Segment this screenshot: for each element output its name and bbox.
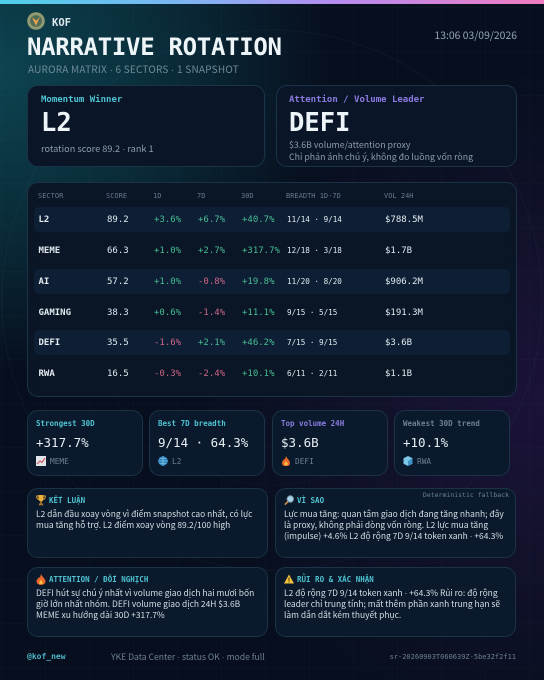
row: AI: +1.0%: [154, 277, 181, 287]
stat card: best 7D breadth: [149, 410, 265, 476]
row: MEME: +1.0%: [154, 246, 181, 256]
footer: handle: @kof_new: [27, 652, 66, 661]
body text: L2 dẫn đầu xoay vòng vì điểm snapshot cao nhất, có lực: [36, 508, 252, 520]
row: MEME: $1.7B: [385, 246, 412, 256]
stat card: best 7D breadth: L2: [172, 457, 181, 466]
row: DEFI: 35.5: [107, 338, 129, 348]
row: L2: 11/14 · 9/14: [287, 215, 342, 224]
row: L2: +40.7%: [242, 215, 275, 225]
row: AI: [34, 269, 510, 294]
row: RWA: $1.1B: [385, 369, 412, 379]
row: RWA: 16.5: [107, 369, 129, 379]
body text: MEME xu hướng dài 30D +317.7%: [36, 609, 165, 621]
row: GAMING: 9/15 · 5/15: [287, 308, 337, 317]
row: DEFI: DEFI: [38, 338, 60, 348]
row: DEFI: $3.6B: [385, 338, 412, 348]
body text: DEFI hút sự chú ý nhất vì volume giao dịch hai mươi bốn: [36, 587, 254, 599]
row: GAMING: -1.4%: [198, 308, 225, 318]
table header: 30D: [241, 192, 254, 200]
top gradient bar: [0, 0, 544, 4]
body text: là proxy, không phải dòng vốn ròng. L2 lực mua tăng: [284, 519, 488, 531]
fallback note: Deterministic fallback: [423, 491, 509, 499]
table header: VOL 24H: [384, 192, 414, 200]
row: DEFI: [34, 330, 510, 355]
stat card: top volume 24H: Top volume 24H: [281, 419, 344, 428]
icon: magnifier: [284, 495, 294, 506]
row: L2: +6.7%: [198, 215, 225, 225]
body text: [36, 587, 254, 621]
heading: VÌ SAO: [297, 496, 324, 505]
row: GAMING: [34, 300, 510, 325]
table header: 7D: [197, 192, 205, 200]
stat card: best 7D breadth: 9/14 · 64.3%: [158, 434, 248, 450]
insight panel: why: [275, 488, 516, 558]
stat card: top volume 24H: [272, 410, 388, 476]
icon: trophy: [36, 495, 46, 506]
brand name: KOF: [52, 17, 71, 29]
row: AI: 57.2: [107, 277, 129, 287]
heading: ATTENTION / ĐỐI NGHỊCH: [49, 575, 148, 584]
row: GAMING: 38.3: [107, 308, 129, 318]
body text: [284, 587, 500, 621]
row: L2: $788.5M: [385, 215, 423, 225]
stat card: strongest 30D: [27, 410, 143, 476]
heading: KẾT LUẬN: [49, 496, 85, 505]
stat card: top volume 24H: DEFI: [295, 457, 314, 466]
stat card: strongest 30D: +317.7%: [36, 434, 89, 450]
row: RWA: -0.3%: [154, 369, 181, 379]
row: DEFI: 7/15 · 9/15: [287, 338, 337, 347]
stat card: strongest 30D: MEME: [50, 457, 69, 466]
row: GAMING: $191.3M: [385, 308, 423, 318]
row: RWA: RWA: [38, 369, 55, 379]
caption: volume proxy note: Chỉ phản ánh chú ý, không đo luồng vốn ròng: [289, 150, 473, 163]
row: L2: +3.6%: [154, 215, 181, 225]
row: RWA: [34, 361, 510, 386]
title: NARRATIVE ROTATION: [27, 32, 282, 60]
panel: sector table: [27, 182, 517, 397]
caption: rotation score: rotation score 89.2 · rank 1: [41, 141, 154, 155]
row: RWA: -2.4%: [198, 369, 225, 379]
body text: L2 độ rộng 7D 9/14 token xanh · +64.3% Rủi ro: độ rộng: [284, 587, 498, 599]
stat card: weakest 30D trend: [394, 410, 510, 476]
row: L2: 89.2: [107, 215, 129, 225]
body text: [36, 508, 252, 531]
insight panel: risk and confirmation: [275, 567, 516, 637]
caption: volume proxy note: $3.6B volume/attention proxy: [289, 138, 410, 151]
body text: leader chỉ trung tính; mất thêm phần xanh trung hạn sẽ: [284, 598, 500, 610]
value: L2: L2: [41, 108, 72, 138]
row: DEFI: +46.2%: [242, 338, 275, 348]
row: GAMING: +0.6%: [154, 308, 181, 318]
stat card: weakest 30D trend: Weakest 30D trend: [403, 419, 480, 428]
body text: [284, 508, 504, 542]
stat card: strongest 30D: Strongest 30D: [36, 419, 95, 428]
value: DEFI: DEFI: [289, 108, 350, 138]
subtitle: AURORA MATRIX · 6 SECTORS · 1 SNAPSHOT: [28, 61, 239, 76]
row: GAMING: GAMING: [38, 308, 71, 318]
row: AI: AI: [38, 277, 49, 287]
row: AI: -0.8%: [198, 277, 225, 287]
row: GAMING: +11.1%: [242, 308, 275, 318]
stat card: weakest 30D trend: RWA: [417, 457, 431, 466]
body text: Lực mua tăng: quan tâm giao dịch đang tăng nhanh; đây: [284, 508, 504, 520]
table header: 1D: [153, 192, 161, 200]
stat card: top volume 24H: $3.6B: [281, 434, 319, 450]
stat card: best 7D breadth: Best 7D breadth: [158, 419, 226, 428]
row: L2: [34, 207, 510, 232]
row: MEME: +2.7%: [198, 246, 225, 256]
label: momentum winner: Momentum Winner: [41, 94, 122, 104]
label: attention volume leader: Attention / Volume Leader: [289, 94, 424, 104]
heading: RỦI RO & XÁC NHẬN: [297, 575, 374, 584]
row: MEME: 12/18 · 3/18: [287, 246, 342, 255]
table header: BREADTH 1D-7D: [286, 192, 341, 200]
body text: làm dẫn dắt kém thuyết phục.: [284, 609, 401, 621]
table header: SECTOR: [38, 192, 63, 200]
row: AI: +19.8%: [242, 277, 275, 287]
icon: KOF logo: [27, 12, 45, 30]
icon: warning: [284, 574, 294, 584]
row: MEME: [34, 238, 510, 263]
row: MEME: +317.7%: [242, 246, 280, 256]
row: DEFI: -1.6%: [154, 338, 181, 348]
stat card: weakest 30D trend: +10.1%: [403, 434, 448, 450]
row: DEFI: +2.1%: [198, 338, 225, 348]
row: MEME: MEME: [38, 246, 60, 256]
row: L2: L2: [38, 215, 49, 225]
row: RWA: +10.1%: [242, 369, 275, 379]
table header: SCORE: [106, 192, 127, 200]
panel: momentum winner: [27, 85, 265, 167]
footer: status: YKE Data Center · status OK · mode full: [111, 651, 265, 663]
table header: [38, 192, 414, 200]
row: AI: $906.2M: [385, 277, 423, 287]
row: MEME: 66.3: [107, 246, 129, 256]
footer: snapshot id: sr-20260903T060639Z-5be32f2f11: [390, 653, 516, 661]
body text: giờ lớn nhất nhóm. DEFI volume giao dịch 24H $3.6B: [36, 598, 240, 610]
row: AI: 11/20 · 8/20: [287, 277, 342, 286]
panel: attention volume leader: [276, 85, 517, 167]
icon: fire: [36, 574, 46, 585]
body text: mua tăng hỗ trợ. L2 điểm xoay vòng 89.2/100 high: [36, 519, 230, 531]
insight panel: conclusion: [27, 488, 268, 558]
body text: (impulse) +4.6% L2 độ rộng 7D 9/14 token xanh · +64.3%: [284, 530, 503, 542]
timestamp: 13:06 03/09/2026: [434, 27, 517, 42]
insight panel: attention divergence: [27, 567, 268, 637]
row: RWA: 6/11 · 2/11: [287, 369, 337, 378]
caption: volume proxy note: [289, 138, 473, 163]
